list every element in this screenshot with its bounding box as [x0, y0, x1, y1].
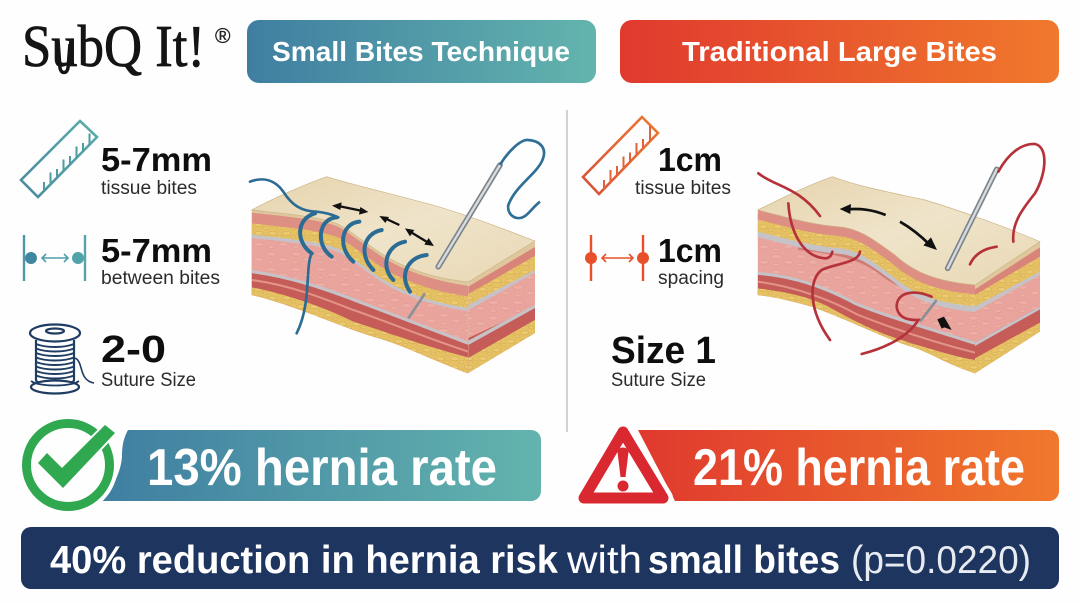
center divider	[566, 110, 568, 432]
stat: 2-0 suture size	[101, 329, 196, 391]
needle	[920, 169, 997, 322]
right side face	[468, 241, 535, 373]
stitches	[250, 179, 427, 333]
result bar: 13% hernia rate: 13% hernia rate	[147, 439, 497, 497]
stat: 1cm tissue bites: 1cm	[658, 141, 722, 178]
stat: 2-0 suture size: Suture Size	[101, 370, 196, 391]
stat: 5-7mm between bites	[101, 232, 220, 289]
summary banner: (p=0.0220)	[851, 539, 1031, 582]
header: Traditional Large Bites: Traditional Large Bites	[682, 36, 997, 67]
summary banner: with	[566, 539, 642, 582]
icon: blue spacing between bites	[24, 235, 85, 281]
skin top surface	[252, 177, 535, 282]
icon: red spacing	[585, 235, 649, 281]
skin top surface	[758, 177, 1040, 285]
result bar: 21% hernia rate	[638, 430, 1059, 501]
logo: SubQ It!: ®	[215, 25, 231, 48]
logo: SubQ It!: SubQ It!	[22, 13, 205, 79]
panel: small bites specs	[21, 121, 220, 394]
stat: Size 1 suture size: Suture Size	[611, 370, 706, 391]
spacing arrows	[332, 202, 434, 246]
icon: green check	[18, 415, 118, 515]
stat: 2-0 suture size: 2-0	[101, 329, 166, 371]
icon: blue ruler	[21, 121, 97, 197]
tension arrows	[840, 204, 952, 330]
stat: 1cm tissue bites: tissue bites	[635, 178, 731, 199]
front layered tissue with gap	[758, 210, 975, 374]
red sutures	[758, 144, 1044, 354]
stat: 5-7mm tissue bites: 5-7mm	[101, 141, 212, 178]
summary banner: small bites	[648, 539, 840, 582]
summary banner: 40% reduction in hernia risk	[50, 539, 558, 582]
illustration: large bites tissue cross-section	[755, 144, 1044, 397]
stat: 5-7mm between bites: between bites	[101, 268, 220, 289]
header: Small Bites Technique: Small Bites Technique	[272, 36, 570, 67]
needle	[408, 140, 544, 318]
stat: 1cm spacing	[658, 232, 724, 289]
icon: red ruler	[583, 117, 658, 194]
stat: 5-7mm between bites: 5-7mm	[101, 232, 212, 269]
icon: warning triangle	[584, 432, 663, 498]
header: Traditional Large Bites	[620, 20, 1059, 83]
right side face	[975, 242, 1040, 373]
stat: Size 1 suture size	[611, 330, 716, 391]
stat: Size 1 suture size: Size 1	[611, 330, 716, 372]
summary banner	[21, 527, 1059, 589]
header: Small Bites Technique	[247, 20, 596, 83]
stat: 1cm tissue bites	[635, 141, 731, 199]
panel: traditional specs	[583, 117, 731, 391]
illustration: small bites tissue cross-section	[248, 138, 546, 374]
result bar: 21% hernia rate: 21% hernia rate	[693, 439, 1025, 497]
front layered tissue	[252, 210, 468, 374]
stat: 1cm spacing: spacing	[658, 268, 724, 289]
stat: 5-7mm tissue bites: tissue bites	[101, 178, 197, 199]
stat: 1cm spacing: 1cm	[658, 232, 722, 269]
icon: suture spool	[30, 324, 94, 394]
stat: 5-7mm tissue bites	[101, 141, 212, 199]
